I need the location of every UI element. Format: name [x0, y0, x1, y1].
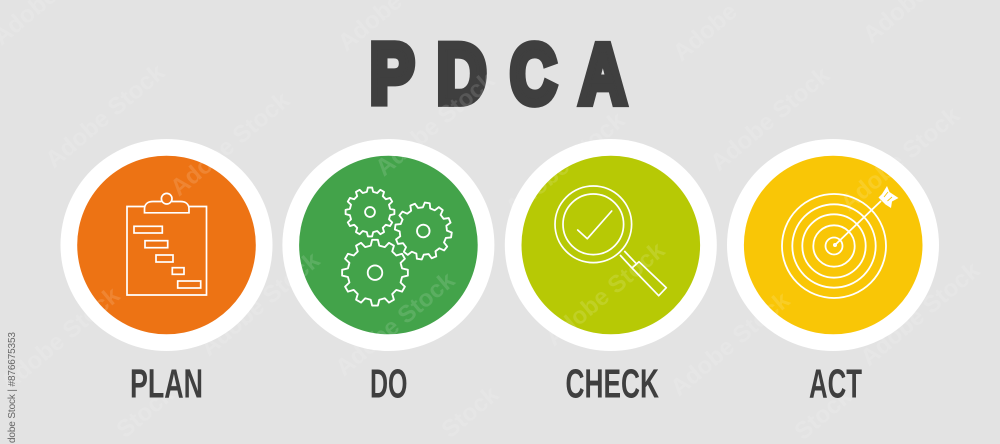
title: PDCA [370, 27, 626, 121]
stock id side text: dobe Stock | #876675353 [7, 332, 18, 443]
panel: do [282, 139, 494, 351]
stock watermark pattern: Adobe Stock [855, 256, 986, 372]
panel: check [505, 139, 717, 351]
title: PDCA: C [510, 27, 556, 120]
stock watermark pattern: Adobe Stock [195, 246, 326, 362]
stock watermark pattern: Adobe Stock [40, 58, 171, 174]
label: do: DO [370, 360, 408, 406]
label: check: CHECK [566, 360, 659, 406]
stock watermark pattern: Adobe Stock [665, 286, 796, 402]
stock watermark pattern: Adobe Stock [330, 266, 461, 382]
stock watermark pattern: Stock [111, 380, 179, 444]
stock watermark pattern: Adobe Stock [540, 236, 671, 352]
title: PDCA: A [580, 27, 626, 120]
label: act: ACT [809, 360, 862, 406]
stock watermark pattern: Adobe Stock [165, 86, 296, 202]
stock watermark pattern: Adobe Stock [835, 101, 966, 217]
plan white ring [60, 139, 272, 351]
icon: three gears [342, 188, 455, 306]
stock watermark pattern: Adobe Stock [500, 106, 631, 222]
label: plan: PLAN [130, 360, 203, 406]
check lime disc [522, 156, 700, 334]
icon: clipboard with gantt chart [127, 193, 206, 295]
do white ring [282, 139, 494, 351]
act yellow disc [744, 156, 922, 334]
plan orange disc [77, 156, 256, 334]
do green disc [299, 156, 478, 334]
act white ring [727, 139, 939, 351]
stock watermark pattern: Adobe Stock [370, 66, 501, 182]
title: PDCA: D [437, 28, 486, 121]
title: PDCA: P [370, 27, 414, 120]
icon: magnifying glass with check mark [555, 186, 666, 296]
panel: act [727, 139, 939, 351]
stock watermark pattern: Stock [436, 380, 504, 444]
icon: target with arrow [782, 186, 898, 298]
panel: plan [60, 139, 272, 351]
check white ring [505, 139, 717, 351]
stock watermark pattern: Adobe Stock [705, 61, 836, 177]
stock watermark pattern: Stock [789, 382, 857, 444]
